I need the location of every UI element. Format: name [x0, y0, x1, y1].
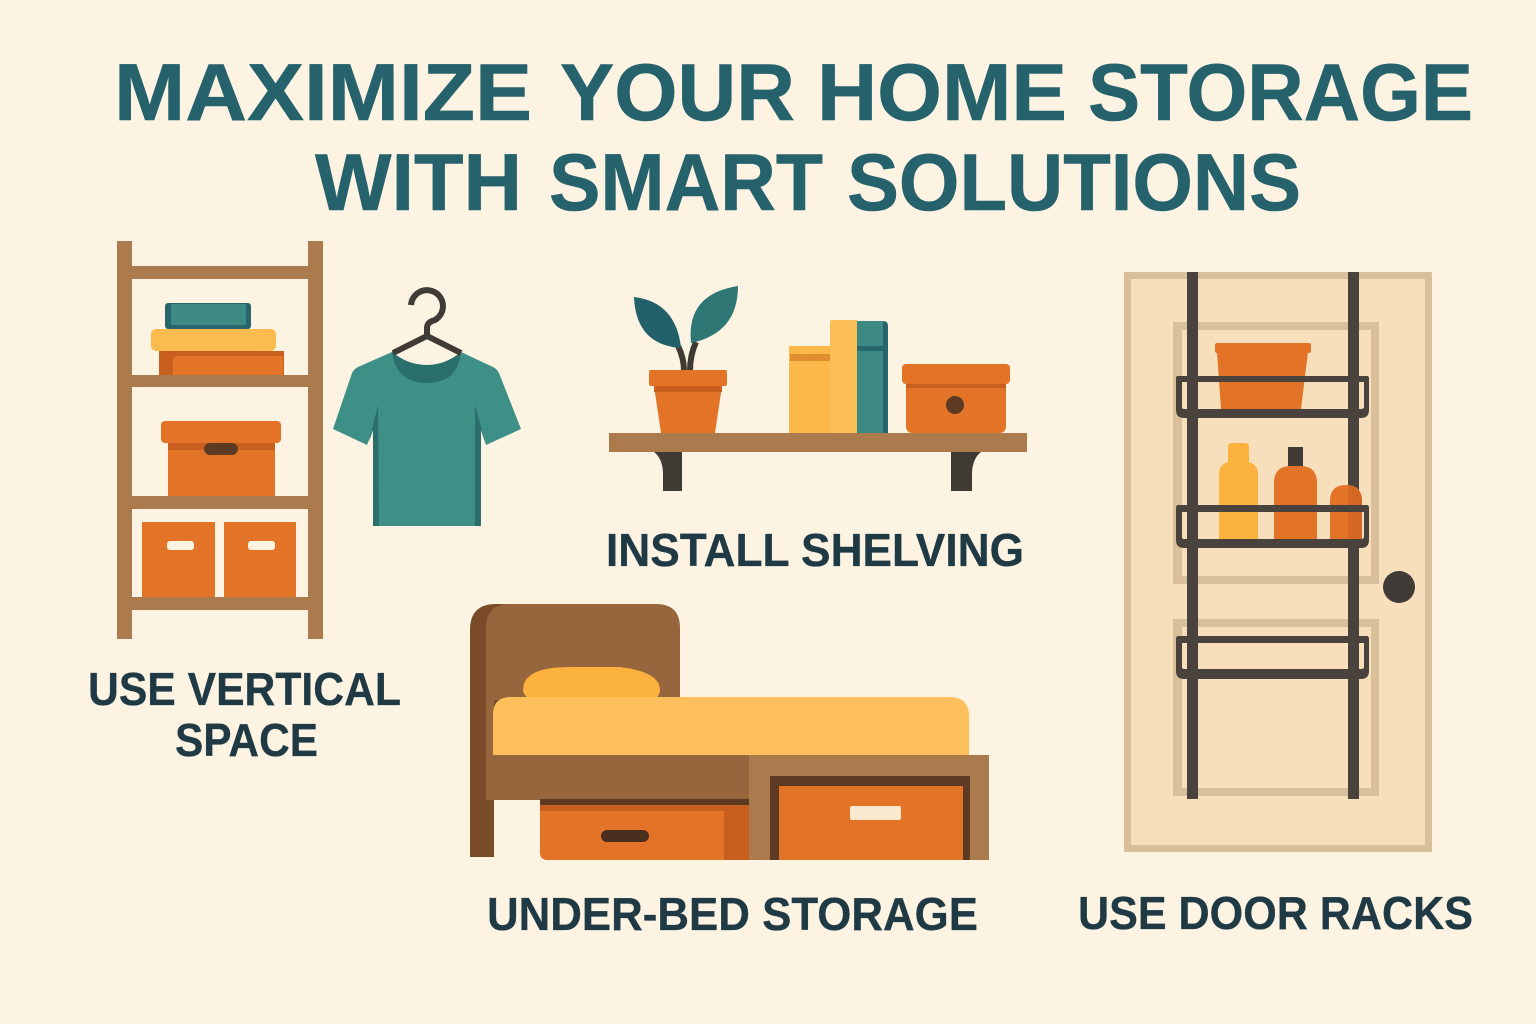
icon: door with over-door rack — [1124, 272, 1432, 852]
label: install shelving: INSTALL SHELVING — [606, 524, 1024, 576]
title: WITH — [315, 138, 522, 228]
title: STORAGE — [1088, 48, 1473, 138]
icon: t-shirt on hanger — [333, 290, 521, 526]
title — [114, 48, 1473, 228]
icon: wall shelf with plant, books and box — [609, 286, 1027, 491]
label: use vertical space — [88, 663, 401, 766]
icon: vertical shelving unit — [117, 241, 323, 639]
label: use vertical space: USE VERTICAL — [88, 663, 401, 715]
title: SMART — [549, 138, 823, 228]
label: use vertical space: SPACE — [175, 714, 318, 766]
icon: bed with under-bed storage drawers — [470, 604, 989, 860]
title: SOLUTIONS — [847, 138, 1301, 228]
title: HOME — [817, 48, 1067, 138]
label: use door racks: USE DOOR RACKS — [1078, 887, 1473, 939]
label: under-bed storage: UNDER-BED STORAGE — [487, 888, 978, 940]
title: YOUR — [560, 48, 795, 138]
title: MAXIMIZE — [114, 48, 532, 138]
